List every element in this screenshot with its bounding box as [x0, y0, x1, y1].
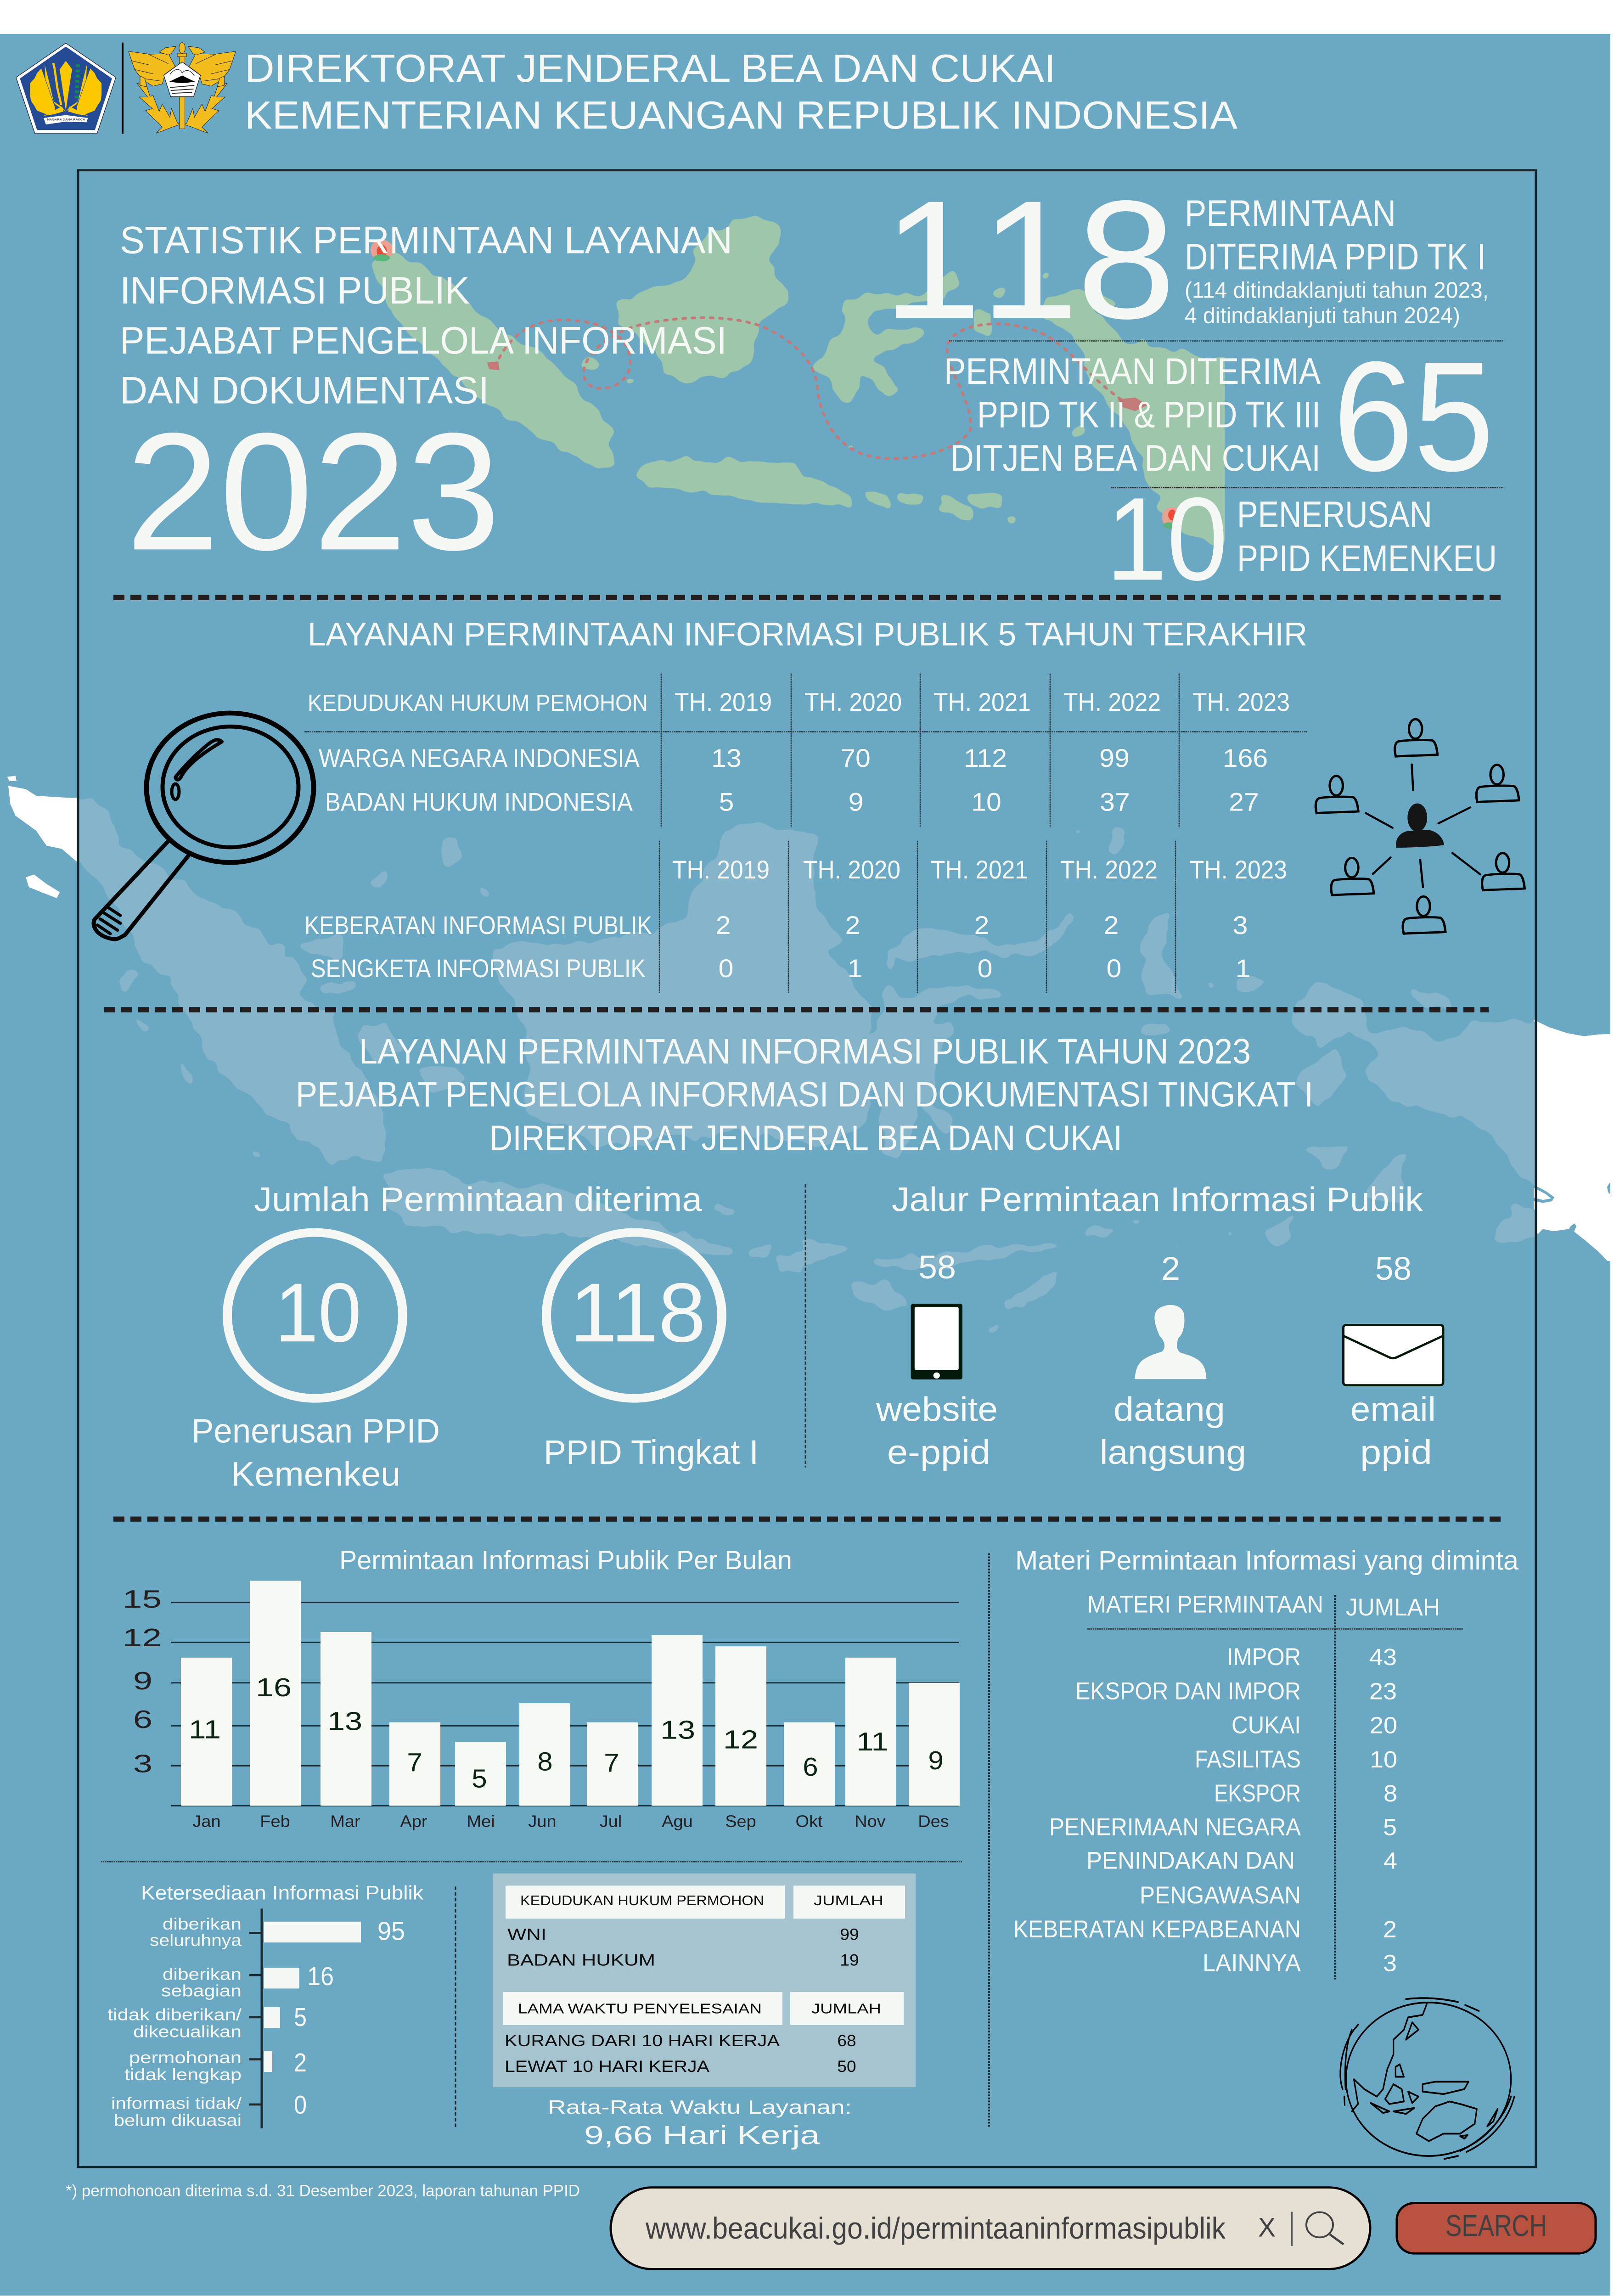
- average service time: [548, 2097, 852, 2150]
- table: objections and disputes: 0: [719, 954, 733, 983]
- bar chart: information availability: tidak diberikan/: [107, 2005, 242, 2024]
- bar chart: requests per month: 12: [123, 1624, 162, 1652]
- stat: 65 requests: [944, 329, 1494, 504]
- table: objections and disputes: 2: [1104, 912, 1119, 940]
- bar chart: requests per month: Mei: [467, 1812, 495, 1830]
- table: objections and disputes: 2: [716, 912, 731, 940]
- panel: request channels: datang: [1113, 1390, 1225, 1429]
- bar chart: information availability: 95: [377, 1917, 405, 1946]
- bar chart: information availability: informasi tidak/: [111, 2094, 242, 2112]
- table: requested material: 5: [1383, 1814, 1397, 1840]
- bar chart: requests per month: 11: [189, 1715, 221, 1744]
- table: objections and disputes: SENGKETA INFORMASI PUBLIK: [311, 954, 646, 983]
- bar chart: requests per month: Agu: [662, 1812, 693, 1830]
- table: legal standing of applicants: 27: [1229, 788, 1259, 816]
- table: requested material: FASILITAS: [1195, 1745, 1301, 1773]
- logo: Bea Cukai: [129, 43, 236, 133]
- bar chart: information availability: 16: [307, 1962, 334, 1991]
- search box: [611, 2188, 1370, 2269]
- heading: statistik: [120, 219, 732, 412]
- heading: statistik: STATISTIK PERMINTAAN LAYANAN: [120, 219, 732, 262]
- table: objections and disputes: TH. 2019: [672, 856, 770, 884]
- table: legal standing of applicants: 37: [1100, 788, 1130, 816]
- panel: request channels: langsung: [1100, 1434, 1246, 1472]
- table: requested material: 43: [1369, 1644, 1397, 1671]
- panel: total requests received: 118: [570, 1266, 706, 1359]
- table: objections and disputes: 0: [1107, 954, 1121, 983]
- panel: legal standing and completion time: BADAN HUKUM: [507, 1951, 655, 1969]
- panel: total requests received: 10: [275, 1266, 361, 1359]
- bar chart: requests per month: 13: [327, 1707, 362, 1736]
- bar chart: requests per month: Nov: [855, 1812, 886, 1830]
- panel border: [78, 170, 1536, 2167]
- bar chart: requests per month: Jul: [600, 1812, 622, 1830]
- table: legal standing of applicants: 112: [964, 744, 1007, 773]
- search box: www.beacukai.go.id/permintaaninformasipublik: [645, 2212, 1226, 2245]
- table: requested material: 23: [1369, 1678, 1397, 1705]
- stat: 65 requests: DITJEN BEA DAN CUKAI: [950, 437, 1321, 479]
- table: objections and disputes: TH. 2022: [1060, 856, 1158, 884]
- table: legal standing of applicants: 166: [1223, 744, 1268, 773]
- white map silhouette outside panel: [7, 776, 1610, 1261]
- average service time: Rata-Rata Waktu Layanan:: [548, 2097, 852, 2118]
- panel: request channels: 58: [1375, 1250, 1412, 1287]
- bar chart: information availability: permohonan: [129, 2048, 242, 2067]
- table: requested material: 20: [1370, 1712, 1397, 1739]
- stat: 118 requests: (114 ditindaklanjuti tahun 2023,: [1185, 277, 1489, 303]
- bar chart: information availability: diberikan: [163, 1965, 242, 1983]
- header logo divider: [122, 43, 124, 134]
- heading: 2023 service: [296, 1032, 1313, 1158]
- heading: 2023 service: LAYANAN PERMINTAAN INFORMASI PUBLIK TAHUN 2023: [359, 1032, 1251, 1071]
- table: legal standing of applicants: TH. 2019: [675, 688, 772, 717]
- table: legal standing of applicants: TH. 2020: [804, 688, 902, 717]
- table: objections and disputes: KEBERATAN INFORMASI PUBLIK: [304, 912, 652, 940]
- average service time: 9,66 Hari Kerja: [584, 2121, 820, 2150]
- table: requested material: PENINDAKAN DAN: [1086, 1847, 1295, 1874]
- panel: legal standing and completion time: KURANG DARI 10 HARI KERJA: [505, 2032, 780, 2050]
- bar chart: information availability: 0: [294, 2090, 307, 2119]
- search box: X: [1258, 2212, 1276, 2242]
- bar chart: information availability: [107, 1882, 423, 2129]
- bar chart: requests per month: 8: [537, 1747, 553, 1776]
- panel: legal standing and completion time: JUMLAH: [811, 2001, 881, 2016]
- bar chart: requests per month: 9: [928, 1746, 944, 1775]
- table: objections and disputes: 1: [848, 954, 862, 983]
- panel: legal standing and completion time: 99: [840, 1925, 859, 1943]
- table: objections and disputes: TH. 2020: [803, 856, 900, 884]
- table: requested material: EKSPOR DAN IMPOR: [1075, 1677, 1301, 1705]
- table: legal standing of applicants: 99: [1099, 744, 1130, 773]
- heading: statistik: DAN DOKUMENTASI: [120, 369, 489, 412]
- panel: legal standing and completion time: 50: [837, 2057, 856, 2076]
- panel: total requests received: [191, 1181, 759, 1493]
- title: directorate: KEMENTERIAN KEUANGAN REPUBLIK INDONESIA: [245, 93, 1238, 137]
- stat: 118 requests: PERMINTAAN: [1185, 192, 1396, 234]
- table: requested material: Materi Permintaan Informasi yang diminta: [1015, 1545, 1518, 1575]
- stat: 65 requests: 65: [1333, 329, 1494, 504]
- stat: 118 requests: 118: [883, 166, 1176, 354]
- panel: total requests received: Kemenkeu: [231, 1455, 400, 1493]
- light map of Indonesia inside panel: [64, 798, 1553, 1336]
- bar chart: information availability: tidak lengkap: [124, 2065, 242, 2084]
- table: legal standing of applicants: TH. 2023: [1192, 688, 1290, 717]
- table: objections and disputes: 1: [1236, 954, 1250, 983]
- table: requested material: JUMLAH: [1346, 1593, 1440, 1621]
- table: objections and disputes: 2: [845, 912, 860, 940]
- panel: legal standing and completion time: WNI: [507, 1925, 546, 1943]
- stat: 10 forwarded: 10: [1106, 473, 1228, 605]
- panel: request channels: Jalur Permintaan Informasi Publik: [892, 1181, 1423, 1219]
- panel: request channels: website: [876, 1390, 998, 1429]
- table: objections and disputes: 3: [1233, 912, 1248, 940]
- bar chart: requests per month: Okt: [795, 1812, 823, 1830]
- table: legal standing of applicants: BADAN HUKUM INDONESIA: [325, 788, 633, 816]
- panel: legal standing and completion time: LAMA WAKTU PENYELESAIAN: [518, 2001, 762, 2016]
- year 2023: 2023: [126, 399, 501, 585]
- stat: 118 requests: [883, 166, 1489, 354]
- heading: statistik: PEJABAT PENGELOLA INFORMASI: [120, 319, 727, 362]
- table: legal standing of applicants: WARGA NEGARA INDONESIA: [319, 744, 640, 773]
- table: requested material: MATERI PERMINTAAN: [1087, 1591, 1323, 1618]
- bar chart: requests per month: 9: [133, 1666, 152, 1694]
- panel: legal standing and completion time: [493, 1874, 916, 2087]
- table: requested material: LAINNYA: [1203, 1949, 1301, 1976]
- title: directorate: DIREKTORAT JENDERAL BEA DAN CUKAI: [245, 46, 1056, 90]
- table: requested material: EKSPOR: [1214, 1779, 1301, 1806]
- bar chart: requests per month: Jan: [192, 1812, 221, 1830]
- table: requested material: 4: [1383, 1848, 1397, 1874]
- bar chart: information availability: 2: [294, 2048, 307, 2077]
- bar chart: requests per month: 5: [472, 1764, 487, 1793]
- table: requested material: KEBERATAN KEPABEANAN: [1013, 1915, 1301, 1942]
- bar chart: requests per month: Permintaan Informasi Publik Per Bulan: [339, 1545, 792, 1575]
- bar chart: information availability: diberikan: [163, 1915, 242, 1933]
- stat: 118 requests: 4 ditindaklanjuti tahun 2024): [1185, 303, 1460, 328]
- search button: SEARCH: [1445, 2209, 1547, 2243]
- table: objections and disputes: 0: [978, 954, 992, 983]
- table: requested material: PENGAWASAN: [1140, 1881, 1301, 1909]
- panel: legal standing and completion time: 68: [837, 2032, 856, 2050]
- bar chart: requests per month: Des: [918, 1812, 949, 1830]
- bar chart: requests per month: 15: [123, 1585, 162, 1613]
- bar chart: information availability: belum dikuasai: [114, 2111, 242, 2129]
- icon: network of people: [1316, 719, 1524, 934]
- panel: total requests received: PPID Tingkat I: [544, 1434, 759, 1472]
- bar chart: requests per month: [123, 1545, 960, 1830]
- footnote: *) permohonoan diterima s.d. 31 Desember 2023, laporan tahunan PPID: [66, 2181, 580, 2200]
- table: requested material: PENERIMAAN NEGARA: [1049, 1813, 1301, 1840]
- bar chart: information availability: 5: [294, 2003, 307, 2032]
- bar chart: requests per month: 3: [133, 1750, 152, 1778]
- panel: request channels: 58: [918, 1249, 956, 1286]
- bar chart: information availability: Ketersediaan Informasi Publik: [141, 1882, 423, 1904]
- panel: legal standing and completion time: LEWAT 10 HARI KERJA: [505, 2057, 709, 2076]
- table: requested material: IMPOR: [1227, 1643, 1301, 1671]
- bar chart: requests per month: Mar: [330, 1812, 360, 1830]
- bar chart: information availability: seluruhnya: [150, 1931, 242, 1950]
- table: requested material: CUKAI: [1232, 1711, 1301, 1739]
- heading: 2023 service: PEJABAT PENGELOLA INFORMASI DAN DOKUMENTASI TINGKAT I: [296, 1075, 1313, 1114]
- panel: request channels: e-ppid: [887, 1434, 990, 1472]
- table: legal standing of applicants: 10: [971, 788, 1001, 816]
- table: objections and disputes: 2: [974, 912, 989, 940]
- table: legal standing of applicants: 9: [849, 788, 863, 816]
- table: legal standing of applicants: TH. 2022: [1063, 688, 1161, 717]
- panel: request channels: 2: [1161, 1250, 1180, 1287]
- heading: 5 year service: LAYANAN PERMINTAAN INFORMASI PUBLIK 5 TAHUN TERAKHIR: [308, 615, 1307, 653]
- title: directorate: [245, 46, 1238, 137]
- bar chart: information availability: dikecualikan: [133, 2022, 242, 2041]
- bar chart: requests per month: 7: [604, 1749, 619, 1778]
- table: requested material: 8: [1383, 1780, 1397, 1806]
- table: requested material: 10: [1370, 1746, 1397, 1773]
- icon: magnifying glass: [94, 713, 314, 940]
- bar chart: requests per month: Sep: [725, 1812, 756, 1830]
- panel: total requests received: Penerusan PPID: [191, 1412, 440, 1450]
- icon: globe: [1340, 1998, 1514, 2159]
- bar chart: requests per month: 7: [407, 1748, 422, 1777]
- stat: 65 requests: PERMINTAAN DITERIMA: [944, 350, 1321, 392]
- logo: Kementerian Keuangan: [16, 43, 116, 133]
- table: requested material: [1013, 1545, 1518, 1980]
- heading: statistik: INFORMASI PUBLIK: [120, 269, 470, 312]
- stat: 65 requests: PPID TK II & PPID TK III: [977, 394, 1321, 435]
- panel: request channels: email: [1350, 1390, 1436, 1429]
- bar chart: information availability: sebagian: [161, 1981, 242, 2000]
- stat: 10 forwarded: PENERUSAN: [1237, 494, 1432, 535]
- panel: total requests received: Jumlah Permintaan diterima: [254, 1181, 703, 1219]
- bar chart: requests per month: 6: [803, 1753, 818, 1782]
- bar chart: requests per month: 13: [660, 1716, 695, 1745]
- table: legal standing of applicants: 13: [711, 744, 742, 773]
- green map with route: [371, 215, 1248, 543]
- stat: 10 forwarded: [1106, 473, 1497, 605]
- table: objections and disputes: TH. 2021: [931, 856, 1028, 884]
- bar chart: requests per month: 6: [133, 1705, 152, 1733]
- panel: request channels: [876, 1181, 1443, 1472]
- bar chart: requests per month: Jun: [528, 1812, 557, 1830]
- panel: legal standing and completion time: JUMLAH: [814, 1893, 883, 1908]
- bar chart: requests per month: 11: [856, 1728, 889, 1756]
- table: legal standing of applicants: 70: [840, 744, 871, 773]
- panel: legal standing and completion time: KEDUDUKAN HUKUM PERMOHON: [520, 1893, 764, 1908]
- stat: 10 forwarded: PPID KEMENKEU: [1237, 538, 1497, 579]
- bar chart: requests per month: 12: [723, 1725, 758, 1754]
- table: legal standing of applicants: KEDUDUKAN HUKUM PEMOHON: [308, 690, 648, 716]
- panel: legal standing and completion time: 19: [840, 1951, 859, 1969]
- logo: Kementerian Keuangan: NAGARA DANA RAKCA: [47, 118, 85, 121]
- stat: 118 requests: DITERIMA PPID TK I: [1185, 236, 1486, 277]
- bar chart: requests per month: 16: [256, 1673, 292, 1702]
- table: requested material: 3: [1383, 1950, 1397, 1976]
- search button: [1397, 2203, 1596, 2253]
- table: objections and disputes: TH. 2023: [1190, 856, 1287, 884]
- table: legal standing of applicants: [304, 674, 1307, 827]
- table: requested material: 2: [1383, 1916, 1397, 1942]
- bar chart: requests per month: Feb: [260, 1812, 290, 1830]
- table: legal standing of applicants: 5: [719, 788, 734, 816]
- panel: request channels: ppid: [1360, 1434, 1432, 1472]
- heading: 2023 service: DIREKTORAT JENDERAL BEA DAN CUKAI: [489, 1118, 1122, 1158]
- bar chart: requests per month: Apr: [400, 1812, 427, 1830]
- table: objections and disputes: [304, 841, 1287, 993]
- table: legal standing of applicants: TH. 2021: [934, 688, 1031, 717]
